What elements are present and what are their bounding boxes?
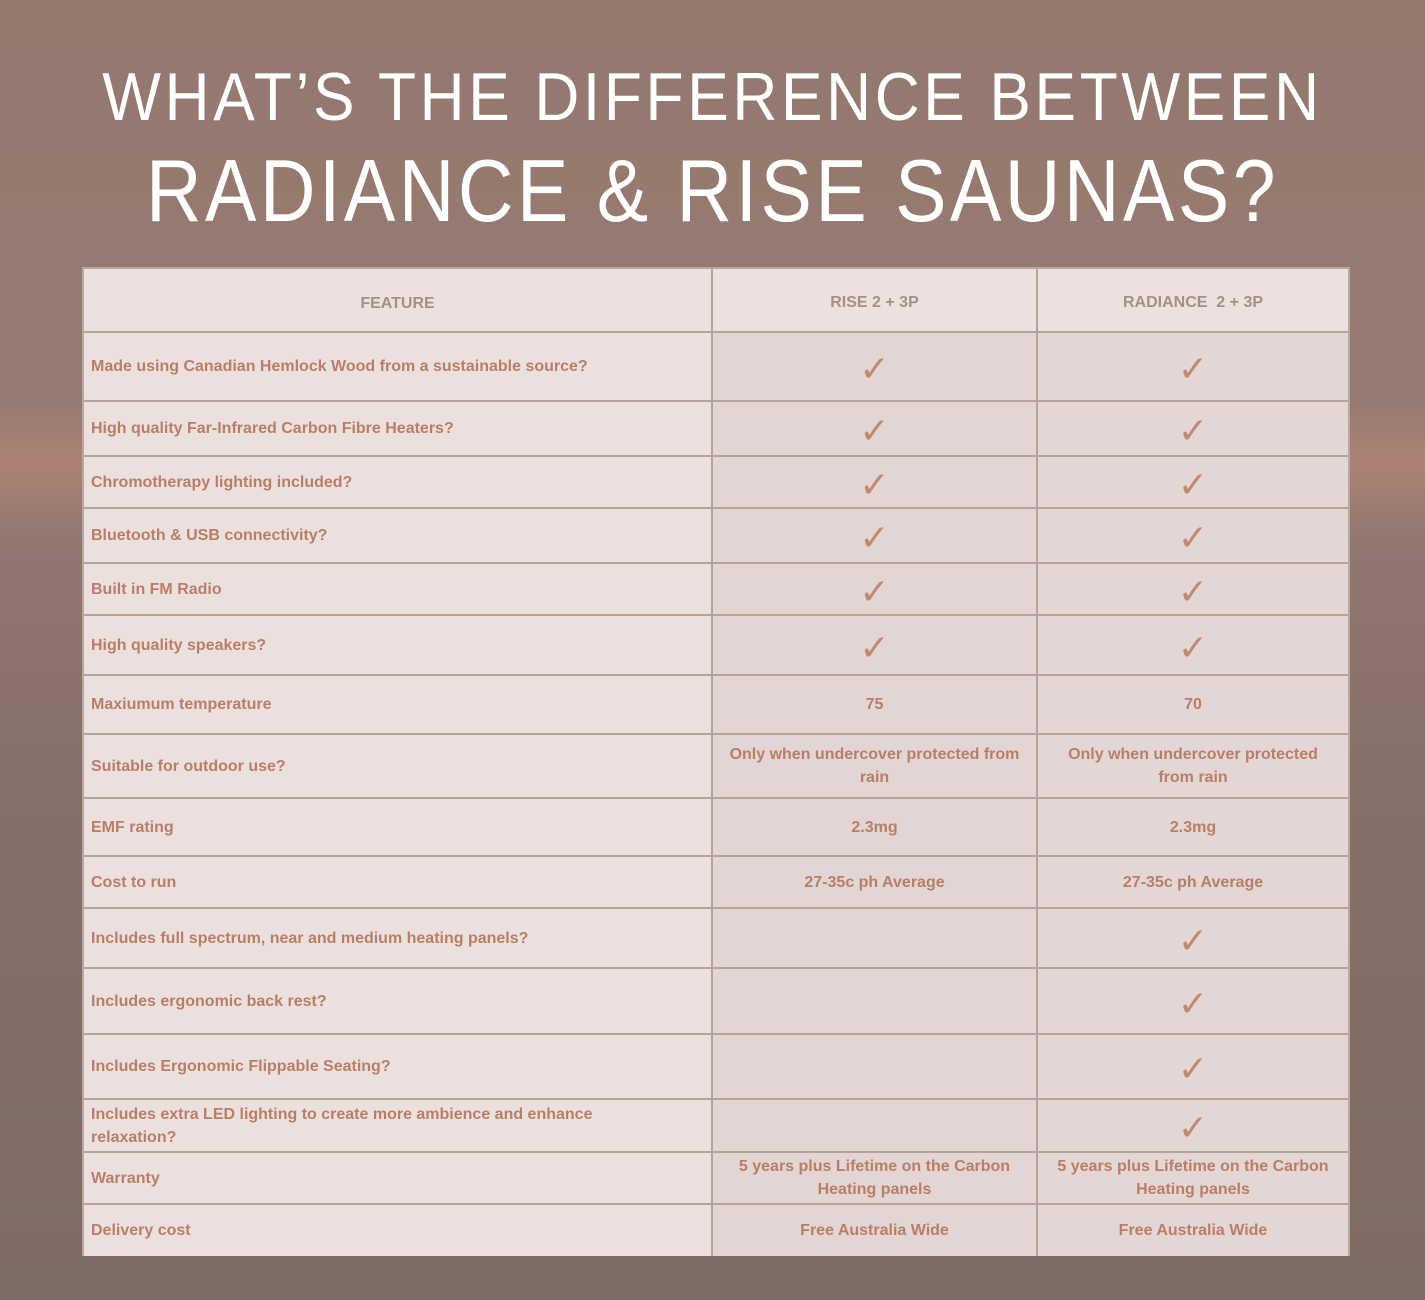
- row: radio: [84, 564, 1348, 616]
- row: delivery: [84, 1205, 1348, 1256]
- row: seating: Includes Ergonomic Flippable Seating?: [91, 1058, 391, 1075]
- row: chromotherapy: ✓: [1178, 464, 1208, 506]
- row: radio: ✓: [1178, 572, 1208, 612]
- row: warranty: 5 years plus Lifetime on the Carbon Heating panels: [739, 1158, 1010, 1198]
- row: radio: Built in FM Radio: [91, 580, 222, 598]
- row: cost: 27-35c ph Average: [1123, 874, 1263, 890]
- row: outdoor: Only when undercover protected from rain: [730, 746, 1019, 786]
- row: seating: [84, 1035, 1348, 1100]
- row: heaters: High quality Far-Infrared Carbon Fibre Heaters?: [91, 420, 454, 437]
- row: back rest: [84, 969, 1348, 1035]
- row: temperature: 75: [866, 696, 883, 713]
- row: emf: 2.3mg: [851, 818, 898, 836]
- row: bluetooth: ✓: [859, 518, 890, 559]
- row: temperature: Maxiumum temperature: [91, 696, 272, 713]
- row: delivery: Delivery cost: [91, 1222, 191, 1239]
- row: chromotherapy: [84, 457, 1348, 509]
- row: warranty: 5 years plus Lifetime on the Carbon Heating panels: [1057, 1158, 1329, 1198]
- row: back rest: Includes ergonomic back rest?: [91, 992, 327, 1010]
- row: seating: ✓: [1178, 1049, 1208, 1090]
- row: hemlock: Made using Canadian Hemlock Wood from a sustainable source?: [91, 358, 588, 375]
- row: outdoor: Suitable for outdoor use?: [91, 758, 286, 774]
- row: LED: relaxation?: [91, 1128, 176, 1146]
- row: hemlock: ✓: [1178, 349, 1208, 390]
- row: bluetooth: Bluetooth & USB connectivity?: [91, 527, 327, 544]
- header row: RISE 2 + 3P: [830, 294, 919, 311]
- text: WHAT’S THE DIFFERENCE BETWEEN: [102, 59, 1323, 135]
- row: full spectrum: [84, 909, 1348, 969]
- row: speakers: ✓: [1178, 628, 1208, 668]
- row: chromotherapy: Chromotherapy lighting included?: [91, 474, 352, 490]
- row: warranty: Warranty: [91, 1170, 160, 1186]
- row: delivery: Free Australia Wide: [1119, 1222, 1267, 1239]
- row: bluetooth: ✓: [1178, 518, 1208, 559]
- row: emf: [84, 799, 1348, 857]
- row: bluetooth: [84, 509, 1348, 564]
- row: heaters: [84, 402, 1348, 457]
- text: RADIANCE & RISE SAUNAS?: [146, 141, 1279, 240]
- title: [102, 59, 1323, 240]
- row: LED: [84, 1100, 1348, 1153]
- row: hemlock: ✓: [859, 349, 890, 390]
- row: LED: Includes extra LED lighting to create more ambience and enhance: [91, 1106, 592, 1122]
- row: hemlock: [84, 333, 1348, 402]
- row: cost: Cost to run: [91, 874, 176, 890]
- row: back rest: ✓: [1178, 984, 1208, 1024]
- header row: FEATURE: [360, 294, 435, 312]
- header row: [84, 269, 1348, 333]
- comparison table: [82, 267, 1350, 1256]
- row: full spectrum: Includes full spectrum, near and medium heating panels?: [91, 930, 528, 946]
- row: speakers: High quality speakers?: [91, 636, 266, 654]
- row: heaters: ✓: [1178, 411, 1208, 452]
- row: speakers: ✓: [859, 628, 890, 668]
- row: chromotherapy: ✓: [859, 464, 890, 506]
- row: LED: ✓: [1178, 1108, 1208, 1149]
- row: temperature: [84, 676, 1348, 735]
- row: emf: 2.3mg: [1170, 818, 1216, 836]
- row: emf: EMF rating: [91, 818, 174, 836]
- row: outdoor: [84, 735, 1348, 799]
- row: warranty: [84, 1153, 1348, 1205]
- row: speakers: [84, 616, 1348, 676]
- row: cost: 27-35c ph Average: [804, 874, 945, 890]
- header row: RADIANCE 2 + 3P: [1123, 294, 1263, 311]
- row: full spectrum: ✓: [1178, 920, 1208, 962]
- row: temperature: 70: [1184, 696, 1202, 713]
- row: radio: ✓: [859, 572, 890, 612]
- row: outdoor: Only when undercover protected from rain: [1068, 746, 1318, 786]
- row: delivery: Free Australia Wide: [800, 1222, 949, 1239]
- row: cost: [84, 857, 1348, 909]
- row: heaters: ✓: [859, 411, 890, 452]
